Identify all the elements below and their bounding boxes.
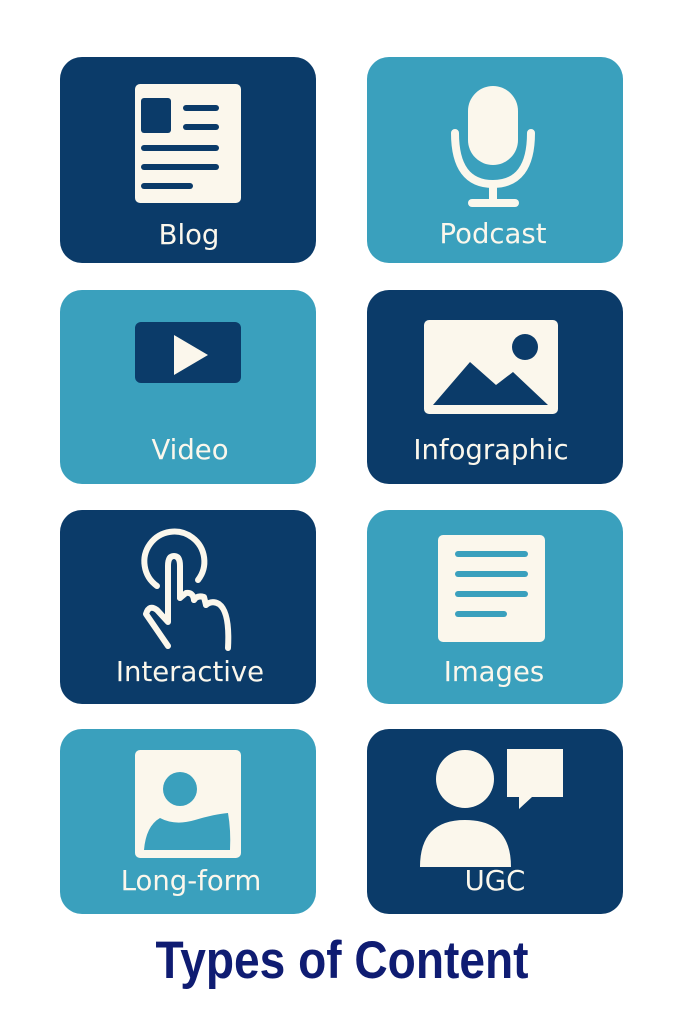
- icon: user with speech bubble: [420, 749, 563, 867]
- icon: touch hand: [144, 532, 228, 648]
- panel: Interactive: [60, 510, 316, 704]
- panel: Blog: [60, 57, 316, 263]
- panel: Long-form: [60, 729, 316, 914]
- icon: microphone: [455, 86, 531, 203]
- title: Types of Content: [155, 930, 529, 990]
- panel: Infographic: [367, 290, 623, 484]
- icon: picture: [424, 320, 558, 414]
- label: UGC: UGC: [465, 865, 525, 897]
- panel: Podcast: [367, 57, 623, 263]
- panel: Video: [60, 290, 316, 484]
- label: Infographic: Infographic: [413, 434, 569, 466]
- label: Video: Video: [151, 434, 229, 466]
- panel: Images: [367, 510, 623, 704]
- panel: UGC: [367, 729, 623, 914]
- label: Blog: Blog: [159, 219, 219, 251]
- label: Long-form: Long-form: [121, 865, 261, 897]
- label: Images: Images: [444, 656, 544, 688]
- icon: blog document: [135, 84, 241, 203]
- label: Interactive: Interactive: [116, 656, 264, 688]
- label: Podcast: Podcast: [440, 218, 547, 250]
- icon: video play: [135, 322, 241, 383]
- icon: document lines: [438, 535, 545, 642]
- icon: profile picture: [135, 750, 241, 858]
